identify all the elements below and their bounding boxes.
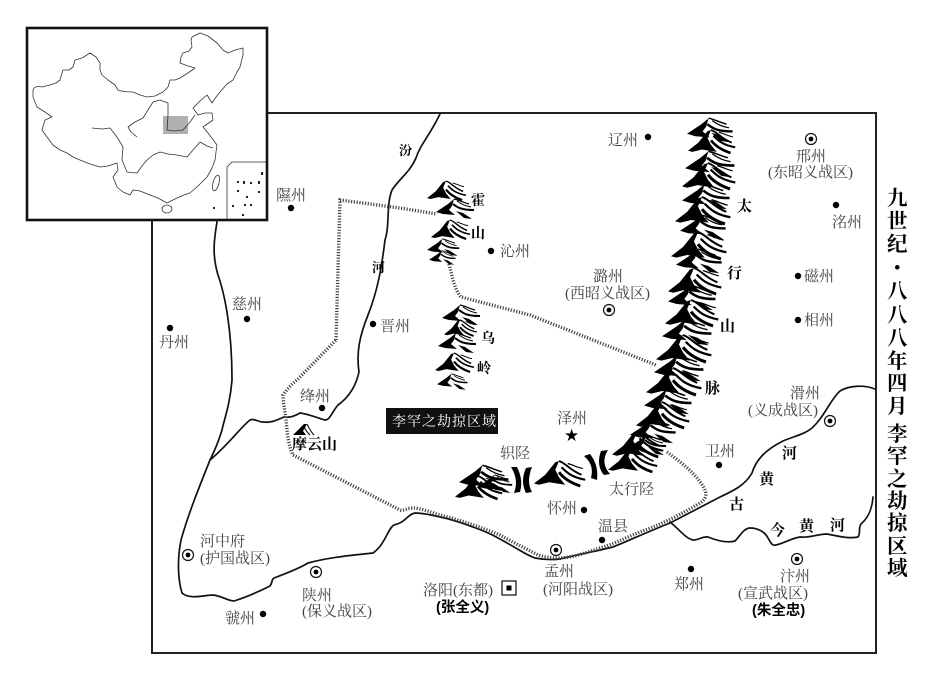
label: 太行山脉: 脉: [705, 379, 720, 397]
label: 孟州 河阳战区: (河阳战区): [543, 581, 613, 598]
Hainan and Taiwan: [162, 205, 172, 213]
label: 郑州: [674, 566, 704, 593]
label: 陕州 保义战区: 陕州: [302, 586, 332, 604]
label: 虢州: [225, 610, 266, 627]
label: 古黄河: 古: [729, 495, 744, 513]
river: Fen: [210, 114, 440, 460]
label: 晋州: 晋州: [380, 318, 410, 335]
label: 陕州 保义战区: [302, 566, 372, 620]
label: 孟州 河阳战区: [543, 544, 613, 598]
mountains: Zhi pass left ridge: [455, 465, 512, 499]
label: 霍山: 霍: [471, 192, 485, 209]
label: 汾河: 汾: [399, 143, 412, 158]
label: 相州: 相州: [804, 312, 834, 329]
label: 绛州: [300, 388, 330, 411]
label: 汴州 宣武战区 朱全忠: (宣武战区): [738, 585, 808, 602]
label: 汾河: 河: [372, 260, 385, 275]
label: 陕州 保义战区: (保义战区): [302, 603, 372, 620]
label: 隰州: [276, 187, 306, 211]
label: 河中府 护国战区: (护国战区): [200, 550, 270, 567]
label: 洛阳 东都 张全义: [423, 581, 516, 616]
label: 古黄河: 河: [782, 445, 797, 462]
label: 潞州 西昭义战区: [565, 268, 650, 316]
label: 邢州 东昭义战区: [768, 134, 853, 181]
label: 古黄河: [729, 445, 797, 513]
label: 邢州 东昭义战区: 邢州: [796, 148, 826, 165]
South China Sea box: [227, 162, 266, 220]
label: 绛州: 绛州: [300, 388, 330, 405]
label: 滑州 义成战区: 滑州: [790, 385, 820, 402]
label: 泽州: [557, 410, 587, 446]
highlighted region: [163, 116, 188, 134]
label: 丹州: 丹州: [159, 334, 189, 351]
label: 孟州 河阳战区: 孟州: [544, 563, 574, 580]
inset map of China: [27, 28, 267, 220]
label: 温县: 温县: [598, 518, 628, 535]
label: 卫州: 卫州: [705, 443, 735, 460]
pass markers: [511, 450, 610, 493]
label: 今黄河: 今: [770, 521, 785, 539]
mountains: Huo Shan: [427, 181, 474, 265]
callout: 李罕之劫掠区域: 李罕之劫掠区域: [392, 413, 497, 430]
label: 霍山: [471, 192, 485, 242]
China outline: [33, 33, 243, 203]
label: 泽州: ★: [564, 426, 579, 446]
label: 汴州 宣武战区 朱全忠: [738, 554, 810, 619]
inner rivers: [92, 128, 213, 173]
label: 霍山: 山: [471, 226, 485, 242]
label: 太行山脉: [705, 198, 752, 397]
label: 潞州 西昭义战区: 潞州: [593, 268, 623, 285]
mountains: Wu Ling: [435, 305, 480, 390]
label: 怀州: 怀州: [547, 500, 577, 517]
label: 丹州: [159, 325, 189, 351]
label: 今黄河: [770, 517, 845, 539]
label: 太行山脉: 太: [737, 198, 752, 215]
mountain icon: Moyun Shan: [293, 424, 314, 435]
label: 乌岭: [477, 330, 495, 377]
label: 虢州: 虢州: [225, 610, 255, 627]
label: 隰州: 隰州: [276, 187, 306, 204]
label: 汴州 宣武战区 朱全忠: 汴州: [780, 568, 810, 585]
label: 滑州 义成战区: (义成战区): [748, 402, 818, 419]
label: 慈州: 慈州: [232, 296, 262, 313]
label: 河中府 护国战区: [182, 533, 270, 567]
mountains: Taihang range: [608, 118, 735, 472]
label: 潞州 西昭义战区: (西昭义战区): [565, 285, 650, 302]
label: 轵陉: 轵陉: [500, 445, 530, 462]
label: 温县: [598, 518, 628, 543]
river: modern Yellow River: [670, 497, 873, 545]
label: 慈州: [232, 296, 262, 322]
label: 郑州: 郑州: [674, 576, 704, 593]
label: 沁州: [488, 243, 530, 260]
label: 古黄河: 黄: [759, 470, 776, 488]
map frame: [152, 113, 876, 653]
boundary: Li Hanzhi raid area: [283, 200, 706, 558]
label: 磁州: 磁州: [804, 268, 834, 285]
callout: 李罕之劫掠区域: [386, 408, 498, 434]
label: 洛阳 东都 张全义: 洛阳(东都): [423, 582, 493, 599]
mountains: Taihang pass middle ridge: [534, 461, 585, 486]
label: 乌岭: 岭: [477, 360, 491, 377]
label: 洛阳 东都 张全义: (张全义): [436, 598, 489, 616]
label: 沁州: 沁州: [500, 243, 530, 260]
label: 今黄河: 黄: [799, 517, 816, 535]
label: 滑州 义成战区: [748, 385, 836, 426]
label: 洺州: [832, 202, 862, 231]
label: 辽州: [608, 132, 651, 149]
label: 洺州: 洺州: [832, 214, 862, 231]
label: 汾河: [372, 143, 412, 275]
label: 太行陉: 太行陉: [609, 481, 654, 498]
label: 卫州: [705, 443, 735, 468]
label: 太行山脉: 山: [720, 318, 735, 335]
label: 邢州 东昭义战区: (东昭义战区): [768, 164, 853, 181]
label: 河中府 护国战区: 河中府: [200, 533, 245, 550]
label: 泽州: 泽州: [557, 410, 587, 427]
label: 辽州: 辽州: [608, 132, 638, 149]
label: 乌岭: 乌: [481, 330, 495, 347]
river: Yellow River west and south course: [178, 222, 875, 601]
label: 今黄河: 河: [830, 517, 845, 534]
label: 汴州 宣武战区 朱全忠: (朱全忠): [752, 601, 805, 619]
label: 摩云山: 摩云山: [292, 435, 337, 453]
label: 太行山脉: 行: [727, 265, 742, 282]
title: 九世纪・八八八年四月李罕之劫掠区域: [887, 187, 909, 580]
